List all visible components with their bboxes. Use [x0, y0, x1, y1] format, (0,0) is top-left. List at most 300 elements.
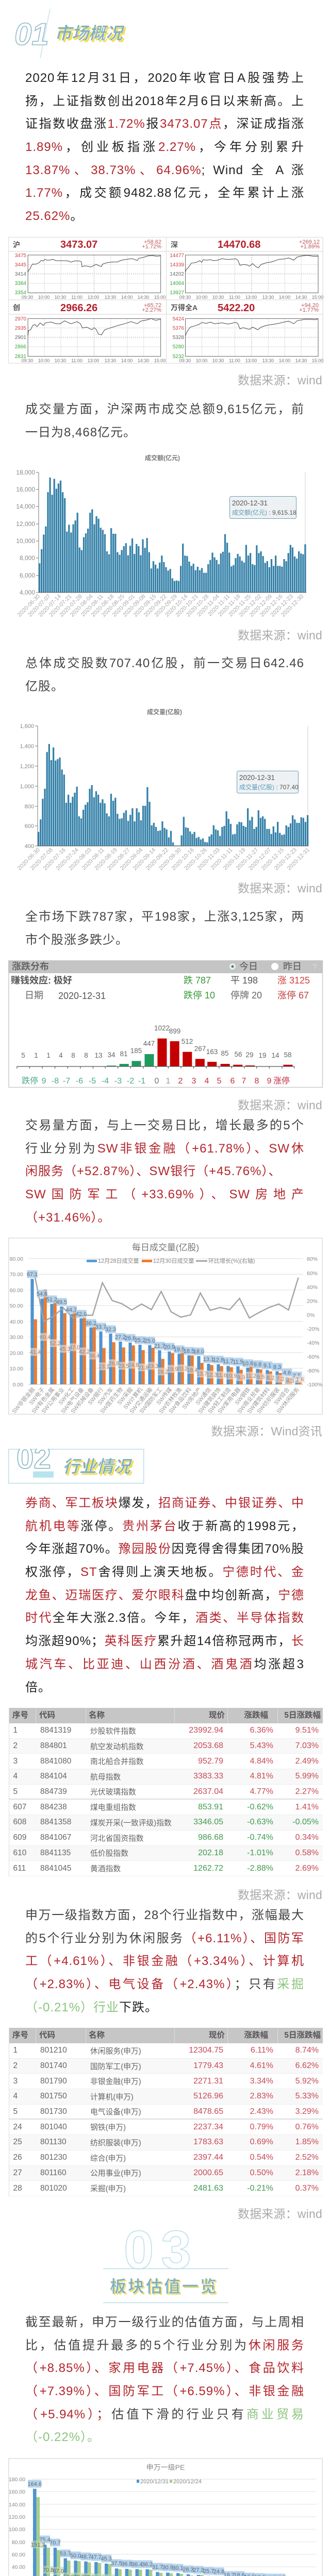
line chart: Shenzhen: 13:30	[262, 295, 274, 300]
table: Shenwan level-1 ranking: 5.92%	[295, 2077, 319, 2086]
blue data labels: 45.3	[101, 2556, 112, 2562]
blue data labels: 10.6	[242, 1361, 253, 1367]
line chart: Shanghai: 09:30	[22, 295, 33, 300]
line chart: Wind All A: 5280	[173, 344, 184, 350]
right axis: -20%	[307, 1326, 320, 1332]
x axis date labels: 2020-12-23	[270, 594, 294, 618]
index header: Shanghai: 沪	[13, 241, 20, 249]
heading text: 行业情况	[64, 1459, 134, 1478]
axis bucket labels: 2	[178, 1077, 183, 1086]
x axis date labels: 2020-11-04	[196, 594, 221, 618]
y axis labels: 600	[25, 823, 34, 829]
index header: Wind All A	[171, 302, 319, 314]
category labels: SW电气设备	[59, 1386, 85, 1415]
table: Shenwan level-1 ranking: 0.50%	[250, 2168, 273, 2177]
table: concept index ranking: -0.74%	[247, 1833, 273, 1842]
axis bucket labels: -2	[127, 1077, 134, 1086]
index header: Wind All A: 5422.20	[218, 302, 255, 314]
x axis date labels: 2020-09-04	[119, 847, 144, 872]
blue data labels: 28.3	[183, 2567, 194, 2573]
blue data labels: 70.7	[50, 2540, 61, 2546]
blue data labels: 8.3	[273, 1364, 281, 1370]
line chart: Shanghai: 3475	[15, 253, 26, 259]
left axis: 20.00	[10, 1350, 23, 1357]
orange data labels: 9.3	[237, 1375, 245, 1381]
table header: 涨跌幅	[244, 1711, 268, 1720]
blue bars	[35, 2489, 311, 2576]
table: concept index ranking: 2637.04	[193, 1787, 223, 1796]
panel header bar: ?	[312, 963, 317, 972]
paragraph: Shenwan level-1 indices: （-0.21%）行业下跌。	[25, 2001, 158, 2014]
table: concept index ranking: 4	[13, 1772, 18, 1781]
line chart: Wind All A: 5328	[173, 335, 184, 341]
line chart: Shenzhen: 15:00	[312, 295, 323, 300]
y axis labels: 16,000	[16, 486, 35, 493]
category labels: SW建筑材料	[245, 1386, 271, 1415]
orange data labels: 8.2	[267, 1375, 274, 1381]
table: Shenwan level-1 ranking: 2237.34	[193, 2123, 223, 2131]
x axis date labels: 2020-07-16	[42, 847, 67, 872]
paragraph: advancers and decliners: 全市场下跌787家，平198家，上涨3,125家，两	[25, 910, 304, 924]
table: concept index ranking: 低价股指数	[90, 1850, 128, 1858]
paragraph: market summary: 25.62%。	[25, 209, 83, 223]
summary row: money effect and counts: 赚钱效应: 极好	[11, 975, 72, 986]
table: Shenwan level-1 ranking: 0.79%	[250, 2123, 273, 2131]
table: concept index ranking: -0.05%	[292, 1818, 319, 1826]
table: concept index ranking: 2.69%	[295, 1864, 319, 1873]
table: Shenwan level-1 ranking: 采掘(申万)	[90, 2185, 126, 2193]
paragraph: sector and stock highlights: 权涨停，ST舍得则上演天地板。宁德时代、金	[25, 1565, 304, 1579]
x axis date labels: 2020-12-09	[249, 594, 273, 618]
index header: ChiNext: +2.27%	[142, 307, 161, 313]
index header: Shenzhen: +1.89%	[300, 244, 320, 250]
line chart: Shanghai: 13:00	[88, 295, 99, 300]
heading text: 行业情况	[62, 1457, 133, 1476]
green data labels	[31, 2542, 320, 2576]
table: concept index ranking: 7.03%	[295, 1741, 319, 1750]
right axis: 60%	[307, 1270, 318, 1277]
bar value labels: 5	[21, 1052, 25, 1059]
blue data labels: 24.8	[213, 2569, 224, 2575]
section header 01: market overview	[14, 9, 126, 58]
blue data labels: 32.3	[105, 1327, 116, 1333]
table: concept index ranking: 884104	[40, 1772, 67, 1781]
table header: 代码	[39, 2031, 55, 2040]
table: Shenwan level-1 ranking: 1779.43	[193, 2061, 223, 2070]
line chart: Shanghai: 10:00	[38, 295, 50, 300]
orange data labels: 7.2	[276, 1376, 284, 1382]
category labels: SW钢铁	[234, 1386, 252, 1406]
table: Shenwan level-1 ranking: 0.37%	[295, 2184, 319, 2193]
x axis date labels	[16, 847, 311, 872]
heading text: 市场概况	[55, 24, 125, 43]
panel: four index intraday charts	[8, 237, 323, 364]
right axis	[307, 1256, 322, 1388]
x axis date labels: 2020-10-16	[171, 847, 195, 872]
axis bucket labels: -3	[114, 1077, 122, 1086]
bar value labels: 1	[46, 1052, 51, 1059]
blue data labels: 25.7	[203, 2568, 214, 2574]
table: Shenwan level-1 ranking: 2.18%	[295, 2168, 319, 2177]
y axis labels: 10,000	[16, 537, 35, 545]
growth line	[34, 1270, 299, 1321]
y axis: 60.00	[12, 2552, 25, 2558]
index header: Wind All A: +1.77%	[299, 307, 319, 313]
table: concept index ranking: 2053.68	[193, 1741, 223, 1750]
x axis date labels: 2020-07-24	[55, 847, 80, 872]
table: concept index ranking: 4.81%	[250, 1772, 273, 1781]
table: concept index ranking: 煤炭开采(一致评级)指数	[90, 1819, 172, 1827]
blue bars	[32, 1279, 296, 1384]
line chart: Wind All A	[173, 316, 323, 363]
paragraph: sector and stock highlights: 倍。	[25, 1681, 51, 1694]
table: Shenwan level-1 ranking: 3.29%	[295, 2107, 319, 2116]
table: concept index ranking: 8841135	[40, 1849, 71, 1857]
x axis date labels: 2020-08-18	[90, 594, 115, 618]
chart title: 成交额(亿元)	[145, 454, 180, 462]
tooltip	[237, 771, 299, 793]
line chart: ChiNext: 13:30	[105, 358, 116, 363]
line chart: Shanghai: 15:00	[154, 295, 166, 300]
table: concept index ranking	[9, 1708, 323, 1876]
table: Shenwan level-1 ranking: 1783.63	[193, 2138, 223, 2146]
table: concept index ranking: 3346.05	[193, 1818, 223, 1826]
x axis date labels: 2020-07-14	[38, 594, 62, 618]
line chart: Shanghai: 3384	[15, 281, 26, 286]
x axis date labels: 2020-09-08	[122, 594, 147, 618]
table: concept index ranking: 23992.94	[189, 1726, 223, 1735]
blue data labels: 18.5	[184, 1348, 194, 1354]
index header: Shanghai: +1.72%	[142, 244, 161, 250]
source note: 数据来源：wind	[238, 629, 322, 642]
paragraph: sector and stock highlights: 今年涨超70%。豫园股份因竞得舍得集团70%股	[25, 1542, 304, 1556]
legend: 2020/12/24	[173, 2479, 202, 2485]
paragraph: trading volume by industry: （+31.46%）。	[25, 1211, 110, 1225]
category labels: SW食品饮料	[167, 1386, 193, 1415]
category labels: SW纺织服装	[255, 1386, 281, 1415]
paragraph: sector and stock highlights	[25, 1496, 304, 1694]
source note: 数据来源：wind	[238, 1098, 322, 1112]
source note: 数据来源：Wind资讯	[211, 1425, 322, 1438]
table: concept index ranking: 986.68	[198, 1833, 223, 1842]
table: concept index ranking: 610	[13, 1849, 26, 1857]
line chart: ChiNext: 2831	[15, 354, 26, 360]
index header: ChiNext: 创	[13, 303, 20, 312]
heading text: 板块估值一览	[111, 2278, 219, 2297]
left axis: 10.00	[10, 1366, 23, 1372]
orange data labels: 9.5	[257, 1374, 265, 1380]
orange data labels: 52.2	[50, 1341, 60, 1347]
table: concept index ranking: 608	[13, 1818, 26, 1826]
blue data labels: 33.7	[95, 1324, 106, 1330]
orange data labels: 12.3	[206, 1372, 217, 1378]
blue data labels: 36.4	[131, 2562, 142, 2568]
paragraph: sector and stock highlights: 时代全年大涨2.3倍。今年，酒类、半导体指数	[25, 1611, 304, 1625]
line chart: Shenzhen: 14477	[170, 253, 184, 259]
paragraph: market summary	[25, 71, 304, 223]
right axis: 80%	[307, 1256, 318, 1262]
blue data labels: 18.0	[193, 1349, 204, 1355]
source note: 数据来源：wind	[238, 2207, 322, 2221]
table: concept index ranking: 3383.33	[193, 1772, 223, 1781]
table: concept index ranking: 炒股软件指数	[90, 1727, 136, 1736]
blue data labels: 27.3	[193, 2567, 204, 2573]
table: concept index ranking: 853.91	[198, 1803, 223, 1811]
blue data labels: 9.8	[254, 1362, 261, 1368]
line chart: Wind All A: 14:30	[295, 358, 307, 363]
category labels: SW计算机	[122, 1386, 144, 1411]
table: concept index ranking: 8841067	[40, 1833, 71, 1842]
paragraph: volume: 亿股。	[25, 680, 64, 693]
bar value labels: 447	[143, 1040, 155, 1047]
table: concept index ranking: 2	[13, 1741, 18, 1750]
table: Shenwan level-1 ranking: 4.61%	[250, 2061, 273, 2070]
category labels: SW有色金属	[30, 1386, 56, 1415]
table header: 名称	[89, 2031, 105, 2040]
line chart: Shanghai: 13:30	[105, 295, 116, 300]
orange data labels: 23.5	[118, 1363, 129, 1369]
right axis: -80%	[307, 1368, 320, 1374]
blue data labels: 49.5	[56, 1299, 67, 1306]
line chart: ChiNext: 2866	[15, 344, 26, 350]
table: concept index ranking: 8841358	[40, 1818, 71, 1826]
x axis date labels: 2020-08-03	[68, 847, 93, 872]
index header: Shanghai: +58.62	[144, 239, 161, 245]
y axis: 80.00	[12, 2539, 25, 2546]
legend: 12月30日成交量	[153, 1257, 194, 1264]
line chart: Wind All A: 5376	[173, 326, 184, 331]
bar value labels	[21, 1024, 292, 1059]
axis bucket labels: 1	[166, 1077, 171, 1086]
x axis date labels: 2020-08-19	[93, 847, 119, 872]
bar value labels: 81	[120, 1050, 128, 1058]
index header: Shenzhen: +269.12	[299, 239, 320, 245]
bar chart: traded volume	[16, 708, 311, 872]
orange data labels: 13.7	[196, 1371, 207, 1377]
table: Shenwan level-1 ranking: 3	[13, 2077, 18, 2086]
blue data labels: 54.6	[37, 1291, 47, 1297]
axis bucket labels: -1	[138, 1077, 145, 1086]
category labels: SW休闲服务	[275, 1386, 301, 1415]
blue data labels: 48.7	[80, 2554, 91, 2560]
table: Shenwan level-1 ranking: 国防军工(申万)	[90, 2063, 141, 2071]
y axis labels: 14,000	[16, 503, 35, 510]
table: concept index ranking: 611	[13, 1864, 26, 1873]
panel header bar: 昨日	[283, 961, 302, 972]
paragraph: sector and stock highlights: 航机电等涨停。贵州茅台收于新高的1998元，	[25, 1519, 304, 1533]
axis bucket labels: 4	[205, 1077, 209, 1086]
paragraph: valuation: （+5.94%）；估值下滑的行业只有商业贸易	[25, 2408, 304, 2421]
orange data labels: 4.3	[286, 1378, 294, 1384]
index header: Shanghai	[13, 239, 161, 250]
blue data labels: 51.2	[46, 1297, 57, 1303]
line chart: Wind All A: 09:30	[179, 358, 191, 363]
line chart: ChiNext	[15, 316, 166, 363]
table header: 代码	[39, 1711, 55, 1720]
table header: 涨跌幅	[244, 2031, 268, 2040]
paragraph: valuation: （+8.85%）、家用电器（+7.45%）、食品饮料	[25, 2361, 304, 2375]
tooltip	[230, 497, 296, 518]
axis bucket labels: -4	[102, 1077, 109, 1086]
bar value labels: 1022	[154, 1024, 170, 1032]
index header: ChiNext	[13, 302, 161, 314]
x axis date labels: 2020-09-30	[158, 847, 183, 872]
x axis date labels: 2020-06-30	[16, 847, 41, 872]
paragraph: volume	[25, 656, 304, 693]
category labels: SW交通运输	[128, 1386, 154, 1415]
table: Shenwan level-1 ranking: 电气设备(申万)	[90, 2108, 141, 2116]
table: Shenwan level-1 ranking: 2271.31	[193, 2077, 223, 2086]
table: concept index ranking: 952.79	[198, 1757, 223, 1766]
table: Shenwan level-1 ranking: 28	[13, 2184, 22, 2193]
summary row: date and limit counts: 跌停 10	[184, 990, 215, 1001]
paragraph: advancers and decliners	[25, 910, 304, 947]
blue data labels: 12.8	[213, 1357, 224, 1363]
paragraph: market summary: 证指数收盘涨1.72%报3473.07点，深证成指涨	[25, 117, 304, 131]
left axis: 40.00	[10, 1319, 23, 1325]
y axis	[9, 2477, 25, 2576]
blue data labels: 50.0	[70, 2553, 81, 2559]
table header: 现价	[209, 2031, 225, 2040]
table: concept index ranking: 1.41%	[295, 1803, 319, 1811]
blue data labels: 164.6	[27, 2481, 42, 2487]
line chart: ChiNext: 15:00	[154, 358, 166, 363]
blue data labels: 36.2	[142, 2562, 153, 2568]
category labels	[10, 1386, 301, 1415]
line chart: Wind All A: 5424	[173, 316, 184, 322]
line chart: Shenzhen: 14339	[170, 262, 184, 268]
table: Shenwan level-1 ranking: 4	[13, 2092, 18, 2100]
table: concept index ranking: 航空发动机指数	[90, 1743, 144, 1751]
tooltip: 2020-12-31	[232, 499, 268, 507]
table: Shenwan level-1 ranking: 3.34%	[250, 2077, 273, 2086]
index header: Wind All A: 万得全A	[171, 303, 197, 312]
orange data labels: 23.1	[98, 1364, 109, 1370]
table: Shenwan level-1 ranking: 综合(申万)	[90, 2155, 126, 2163]
x axis date labels: 2020-10-28	[185, 594, 210, 618]
blue data labels: 75.4	[39, 2537, 51, 2543]
right axis: 0%	[307, 1312, 315, 1318]
paragraph: trading volume by industry: SW国防军工（+33.69%）、SW房地产	[25, 1188, 304, 1201]
blue data labels: 4.6	[283, 1370, 291, 1376]
blue data labels	[27, 1272, 302, 1379]
blue data labels: 13.1	[203, 1357, 214, 1363]
index header: Shenzhen: 深	[171, 241, 178, 249]
summary row: money effect and counts: 涨 3125	[277, 975, 310, 986]
line chart: Shenzhen: 14064	[170, 281, 184, 286]
y axis labels: 18,000	[16, 469, 35, 476]
blue data labels: 36.2	[86, 1320, 96, 1327]
line chart: Shanghai: 14:30	[138, 295, 149, 300]
table: Shenwan level-1 ranking: 801020	[40, 2184, 67, 2193]
paragraph: valuation: 比，估值提升最多的5个行业分别为休闲服务	[25, 2338, 304, 2352]
blue data labels: 9.1	[263, 1363, 271, 1369]
category labels: SW化工	[57, 1386, 75, 1406]
x axis date labels: 2020-07-07	[27, 594, 52, 618]
right axis: 20%	[307, 1298, 318, 1304]
line chart: Wind All A: 14:00	[279, 358, 290, 363]
summary row: date and limit counts: 2020-12-31	[58, 991, 106, 1001]
x axis date labels: 2020-12-15	[260, 847, 285, 872]
x axis date labels: 2020-08-11	[81, 847, 106, 871]
blue data labels: 37.5	[111, 2561, 122, 2567]
orange data labels: 60.4	[40, 1334, 51, 1341]
line chart: ChiNext: 13:00	[88, 358, 99, 363]
y axis labels: 1,000	[20, 784, 34, 790]
blue data labels: 36.8	[121, 2561, 133, 2567]
y axis: 180.00	[9, 2477, 25, 2483]
axis bucket labels: 涨停	[273, 1076, 290, 1086]
x axis date labels: 2020-08-27	[106, 847, 131, 872]
table: Shenwan level-1 ranking: 5	[13, 2107, 18, 2116]
section header 02: industry situation	[8, 1449, 144, 1484]
summary row: date and limit counts	[25, 990, 309, 1001]
summary row: date and limit counts: 停牌 20	[230, 990, 262, 1001]
paragraph: Shenwan level-1 indices	[25, 1908, 304, 2014]
line chart: Shanghai	[15, 253, 166, 300]
table: Shenwan level-1 ranking: 26	[13, 2153, 22, 2162]
left axis: 0.00	[13, 1382, 23, 1388]
line chart: ChiNext: 2970	[15, 316, 26, 322]
table header	[9, 2028, 323, 2043]
table: Shenwan level-1 ranking: 1	[13, 2046, 18, 2055]
bar chart: turnover amount	[16, 454, 306, 618]
paragraph: trading volume by industry: 交易量方面，与上一交易日比，增长最多的5个	[25, 1118, 304, 1132]
table: concept index ranking: 1	[13, 1726, 18, 1735]
left axis: 70.00	[10, 1272, 23, 1278]
x axis date labels: 2020-12-31	[286, 847, 311, 872]
table: concept index ranking: 3	[13, 1757, 18, 1766]
x axis date labels: 2020-09-14	[132, 847, 157, 872]
table: Shenwan level-1 ranking	[9, 2028, 323, 2196]
x axis date labels: 2020-08-04	[69, 594, 94, 618]
y axis: 100.00	[9, 2527, 25, 2533]
orange data labels: 45.3	[59, 1346, 70, 1352]
line chart: Shanghai: 14:00	[121, 295, 133, 300]
line chart: ChiNext: 10:00	[38, 358, 50, 363]
orange data labels: 18.4	[187, 1367, 197, 1374]
blue data labels: 27.2	[115, 1334, 126, 1341]
orange data labels: 20.2	[177, 1366, 188, 1372]
bar value labels: 58	[284, 1051, 292, 1059]
table: concept index ranking: 黄酒指数	[90, 1865, 121, 1873]
x axis date labels: 2020-12-30	[280, 594, 305, 618]
table: Shenwan level-1 ranking: 2397.44	[193, 2153, 223, 2162]
paragraph: trading volume by industry: 行业分别为SW非银金融（+61.78%）、SW休	[25, 1142, 304, 1156]
paragraph: market summary: 2020年12月31日，2020年收官日A股强势上	[25, 71, 304, 85]
table: concept index ranking: 1262.72	[193, 1864, 223, 1873]
category labels: SW国防军工	[138, 1386, 163, 1415]
line chart: Shenzhen: 13:00	[245, 295, 257, 300]
tooltip: 2020-12-31	[239, 774, 275, 782]
paragraph: turnover: 一日为8,468亿元。	[25, 426, 136, 439]
table: concept index ranking: 5.99%	[295, 1772, 319, 1781]
blue data labels: 20.9	[164, 1344, 175, 1350]
paragraph: market summary: 1.77%，成交额9482.88亿元，全年累计上涨	[25, 186, 304, 200]
y axis labels: 400	[25, 843, 34, 850]
right axis: 40%	[307, 1284, 318, 1291]
axis bucket labels: -5	[89, 1077, 96, 1086]
left axis	[10, 1256, 23, 1388]
blue data labels: 25.0	[144, 1338, 155, 1344]
table: Shenwan level-1 ranking: 钢铁(申万)	[90, 2124, 126, 2132]
line chart: Shanghai: 11:00	[71, 295, 82, 300]
index header: Shenzhen	[171, 239, 320, 250]
table: concept index ranking: 光伏玻璃指数	[90, 1788, 136, 1797]
table: Shenwan level-1 ranking: 12304.75	[189, 2046, 223, 2055]
paragraph: volume: 总体成交股数707.40亿股，前一交易日642.46	[25, 656, 304, 670]
index header: ChiNext: 2966.26	[60, 302, 97, 314]
